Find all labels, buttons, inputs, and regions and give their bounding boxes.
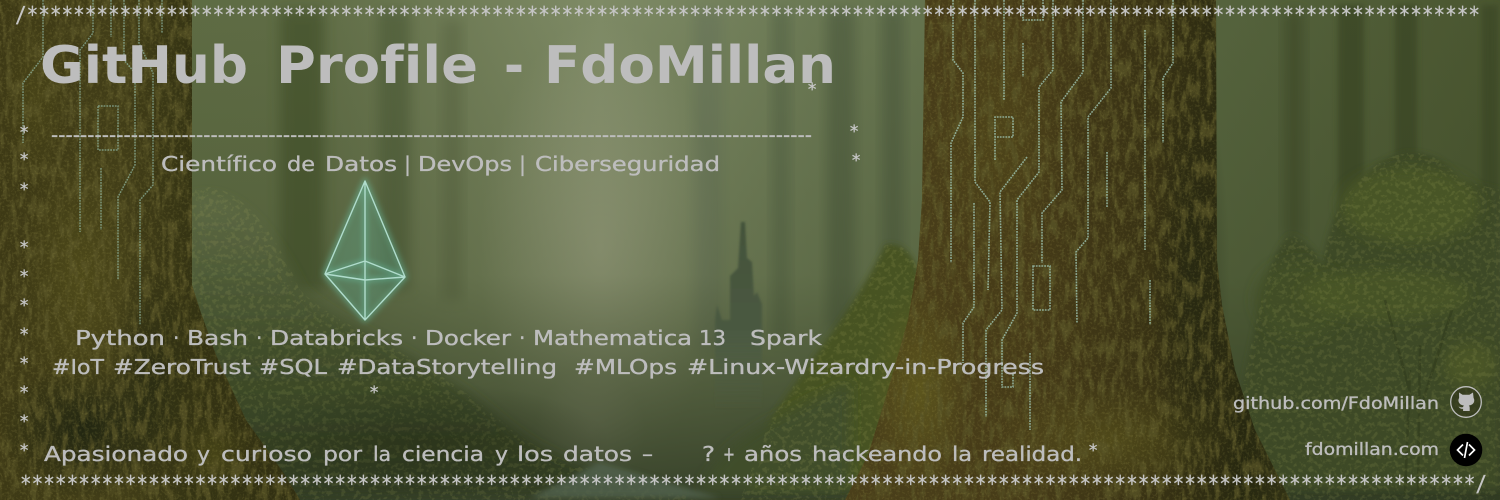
icon: code — [1450, 434, 1482, 466]
icon: github — [1451, 387, 1481, 417]
tech stack: 13 — [699, 326, 726, 350]
subtitle — [161, 152, 720, 176]
left column stars: * — [19, 441, 29, 461]
circuit traces: right trunk — [951, 0, 1173, 430]
hashtags: #MLOps — [574, 355, 677, 379]
left column stars: * — [19, 238, 29, 258]
tagline: y — [495, 442, 508, 466]
left column stars: * — [19, 123, 29, 143]
right column stars: * — [849, 122, 859, 142]
title: FdoMillan — [544, 36, 836, 96]
subtitle: DevOps — [418, 152, 512, 176]
tech stack: · — [256, 326, 262, 350]
tagline: curioso — [221, 442, 312, 466]
subtitle: Ciberseguridad — [535, 152, 720, 176]
tagline — [44, 442, 1082, 466]
divider dashes: --------------------------------------------------------------------------------------------------------- — [51, 123, 812, 147]
circuit traces: left trunk — [23, 0, 162, 325]
subtitle: Datos — [325, 152, 397, 176]
tagline: realidad. — [982, 442, 1082, 466]
centre star: * — [369, 383, 379, 403]
title: Profile — [276, 36, 478, 96]
left column stars: * — [19, 412, 29, 432]
left tree trunk — [0, 0, 300, 500]
left column stars: * — [19, 325, 29, 345]
left column stars — [19, 123, 29, 461]
subtitle: | — [519, 152, 526, 176]
distant circuit tower — [715, 222, 762, 410]
tagline end star: * — [1088, 441, 1098, 461]
tech stack: Mathematica — [533, 326, 692, 350]
tech stack — [75, 326, 823, 350]
left column stars: * — [19, 354, 29, 374]
tech stack: Python — [75, 326, 165, 350]
hashtags: #IoT — [52, 355, 105, 379]
tagline: + — [723, 442, 735, 466]
icon: glowing crystal — [325, 181, 405, 320]
hashtags: #DataStorytelling — [337, 355, 557, 379]
tech stack: Spark — [750, 326, 823, 350]
hashtags: #Linux-Wizardry-in-Progress — [687, 355, 1044, 379]
tagline: y — [197, 442, 210, 466]
website link: fdomillan.com — [1305, 440, 1439, 459]
tech stack: · — [411, 326, 417, 350]
tagline: por — [323, 442, 363, 466]
hashtags: #SQL — [259, 355, 328, 379]
tagline: ciencia — [402, 442, 484, 466]
foliage mounds — [190, 150, 1500, 500]
tagline: años — [744, 442, 802, 466]
subtitle: Científico — [161, 152, 277, 176]
tagline: datos — [563, 442, 632, 466]
right tree trunk — [845, 0, 1290, 500]
tagline: la — [952, 442, 972, 466]
subtitle: de — [287, 152, 315, 176]
subtitle: | — [404, 152, 411, 176]
left column stars: * — [19, 383, 29, 403]
title: - — [504, 36, 524, 96]
left column stars: * — [19, 150, 29, 170]
hashtags: #ZeroTrust — [113, 355, 251, 379]
title: GitHub — [40, 36, 248, 96]
left column stars: * — [19, 180, 29, 200]
tagline: la — [373, 442, 391, 466]
title — [40, 36, 836, 96]
tagline: Apasionado — [44, 442, 188, 466]
tech stack: Databricks — [270, 326, 403, 350]
tagline: hackeando — [812, 442, 942, 466]
tech stack: · — [519, 326, 525, 350]
tech stack: Docker — [425, 326, 512, 350]
left column stars: * — [19, 267, 29, 287]
tagline: los — [517, 442, 553, 466]
tagline: ? — [702, 442, 715, 466]
tech stack: · — [173, 326, 179, 350]
tech stack: Bash — [187, 326, 248, 350]
tagline: – — [642, 442, 653, 466]
hashtags — [52, 355, 1044, 379]
left column stars: * — [19, 296, 29, 316]
github link: github.com/FdoMillan — [1233, 394, 1439, 413]
right column stars — [849, 122, 861, 171]
star after title: * — [807, 80, 817, 100]
right column stars: * — [851, 151, 861, 171]
